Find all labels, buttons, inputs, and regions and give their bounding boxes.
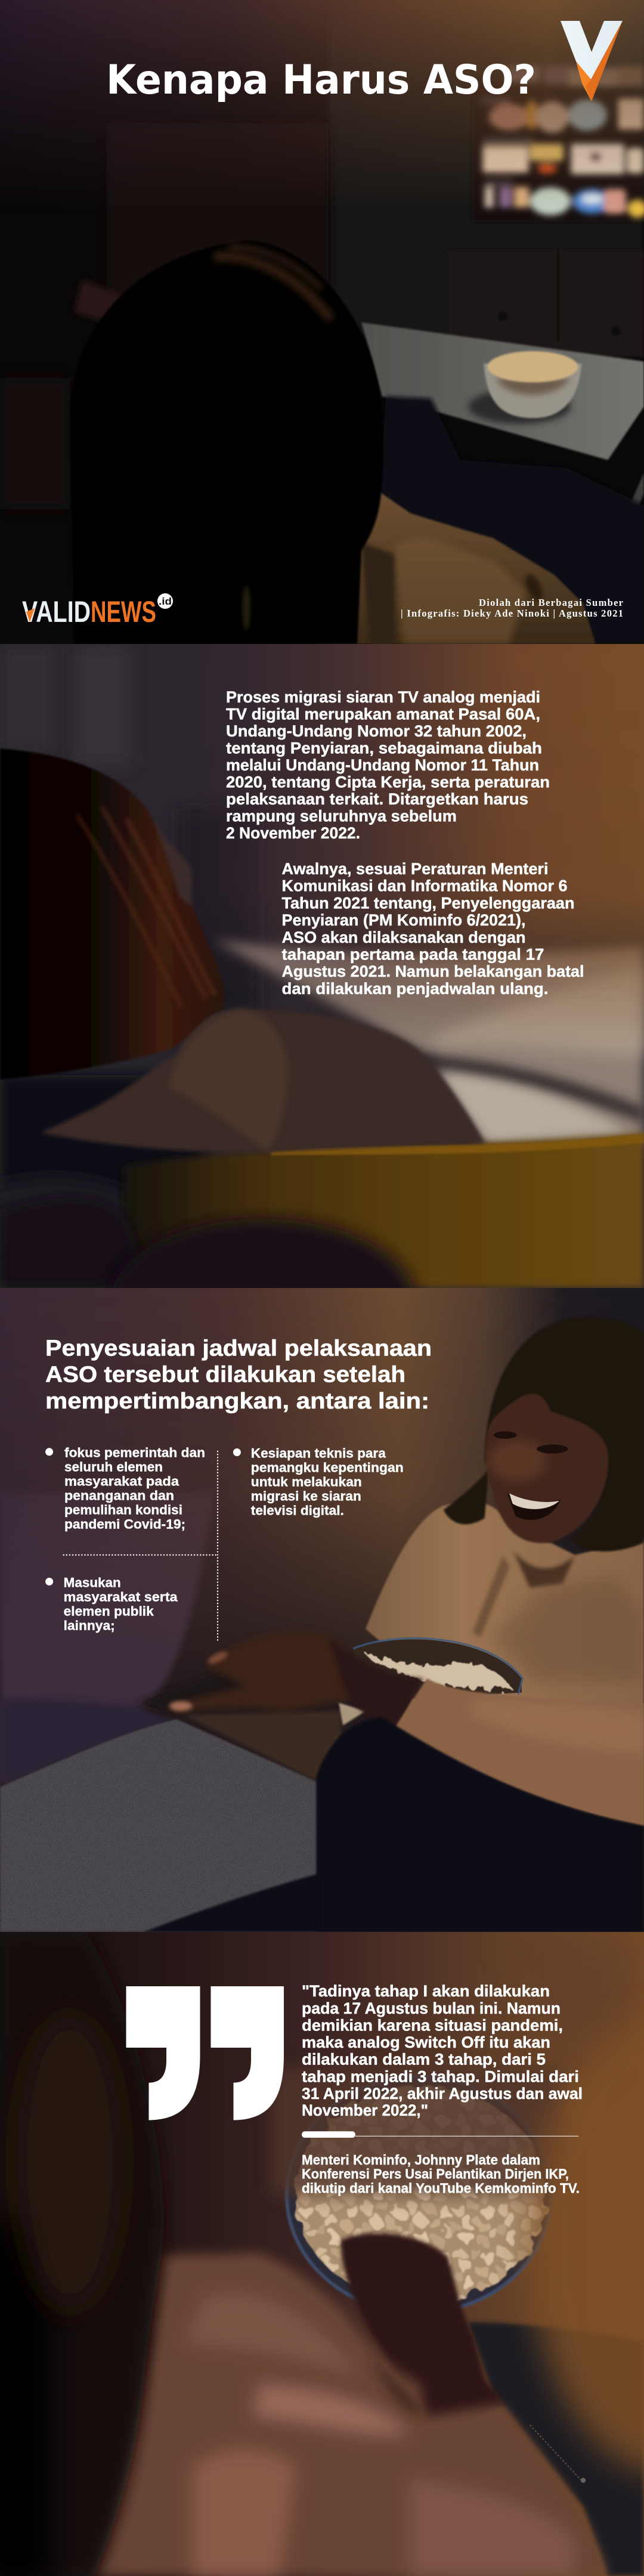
list item: public input: elemen publik — [64, 1604, 154, 1618]
popcorn bowl — [339, 1638, 522, 1726]
text block: schedule change: Tahun 2021 tentang, Penyelenggaraan — [281, 894, 575, 912]
TV cabinet — [448, 250, 644, 357]
text block: schedule change: tahapan pertama pada tanggal 17 — [281, 946, 544, 964]
hand and forearm — [341, 2233, 505, 2441]
list item: public input — [45, 1575, 178, 1633]
list item: government focus: masyarakat pada — [64, 1474, 179, 1489]
panel: minister quote — [0, 1932, 644, 2576]
text block: schedule change: ASO akan dilaksanakan dengan — [281, 928, 526, 946]
source credit: | Infografis: Dieky Ade Ninoki | Agustus 2021 — [401, 608, 623, 619]
list item: public input: masyarakat serta — [64, 1590, 178, 1604]
heading — [45, 1336, 432, 1414]
quote text — [302, 1982, 583, 2119]
curtain — [0, 1493, 213, 1785]
viewer's head — [70, 240, 383, 644]
background photo: dim room with TV and viewer — [0, 0, 644, 644]
blurred hoodie — [94, 2252, 608, 2576]
source credit — [401, 597, 623, 619]
text block: migration mandate: melalui Undang-Undang Nomor 11 Tahun — [226, 756, 539, 774]
face — [485, 1394, 608, 1543]
face profile — [153, 816, 193, 907]
hair — [0, 749, 224, 1079]
title: Kenapa Harus ASO? — [106, 57, 536, 104]
icon: closing quotation marks — [126, 1986, 284, 2120]
quote text: November 2022," — [302, 2101, 428, 2119]
text block: schedule change — [281, 860, 584, 998]
quote attribution: dikutip dari kanal YouTube Kemkominfo TV. — [302, 2181, 580, 2196]
quote attribution — [302, 2152, 580, 2196]
heading: Penyesuaian jadwal pelaksanaan — [45, 1336, 432, 1361]
popcorn bowl — [468, 351, 581, 424]
panel: opening cover with title — [0, 0, 644, 644]
list item: government focus: fokus pemerintah dan — [64, 1445, 205, 1460]
lower shadow — [0, 1071, 208, 1207]
panel: reasons for rescheduling — [0, 1288, 644, 1932]
jeans — [370, 397, 644, 644]
carpet — [0, 1715, 329, 1932]
logo: Validnews.id: .id — [159, 596, 172, 607]
logo: Validnews.id: NEWS — [91, 595, 156, 628]
hoodie torso — [366, 1501, 644, 1826]
coffee table — [361, 323, 644, 460]
quote text: "Tadinya tahap I akan dilakukan — [302, 1982, 550, 2000]
heading: ASO tersebut dilakukan setelah — [45, 1363, 405, 1388]
popcorn bowl — [271, 2067, 567, 2314]
background photo: hand in popcorn bowl — [0, 1932, 644, 2576]
text block: migration mandate: 2020, tentang Cipta Kerja, serta peraturan — [226, 773, 550, 791]
text block: migration mandate: 2 November 2022. — [226, 824, 360, 842]
background photo: wall and lit sofa — [0, 644, 644, 1288]
text block: schedule change: Awalnya, sesuai Peraturan Menteri — [281, 860, 549, 878]
text block: schedule change: Agustus 2021. Namun belakangan batal — [281, 962, 584, 980]
icon: V brand mark — [561, 21, 623, 101]
hoodie — [316, 491, 596, 644]
quote attribution: Konferensi Pers Usai Pelantikan Dirjen IKP, — [302, 2166, 569, 2181]
divider — [302, 2131, 578, 2138]
logo: Validnews.id: VALID — [22, 595, 91, 628]
TV screen — [472, 66, 644, 222]
mustard pillow — [0, 1133, 644, 1383]
quote text: tahap menjadi 3 tahap. Dimulai dari — [302, 2068, 579, 2086]
list item: government focus: pemulihan kondisi — [64, 1503, 182, 1517]
list item: government focus: pandemi Covid-19; — [64, 1516, 185, 1531]
text block: schedule change: dan dilakukan penjadwalan ulang. — [281, 980, 549, 998]
list item: public input: Masukan — [64, 1575, 121, 1590]
text block: migration mandate — [226, 688, 550, 842]
quote attribution: Menteri Kominfo, Johnny Plate dalam — [302, 2152, 540, 2168]
quote text: maka analog Switch Off itu akan — [302, 2033, 550, 2051]
text block: schedule change: Penyiaran (PM Kominfo 6/2021), — [281, 911, 526, 929]
quote text: dilakukan dalam 3 tahap, dari 5 — [302, 2051, 546, 2069]
text block: schedule change: Komunikasi dan Informatika Nomor 6 — [281, 877, 568, 895]
text block: migration mandate: tentang Penyiaran, sebagaimana diubah — [226, 739, 542, 757]
list item: technical readiness: pemangku kepentingan — [251, 1460, 404, 1475]
text block: migration mandate: Undang-Undang Nomor 32 tahun 2002, — [226, 722, 527, 740]
right orange glow — [530, 2014, 644, 2474]
jeans — [468, 2322, 644, 2576]
list item: technical readiness: Kesiapan teknis para — [251, 1445, 386, 1461]
list item: technical readiness — [233, 1445, 404, 1518]
hair — [485, 1317, 644, 1552]
quote text: pada 17 Agustus bulan ini. Namun — [302, 1999, 561, 2017]
background photo: woman lying on sofa — [0, 749, 644, 1383]
logo: Validnews.id — [22, 593, 173, 628]
panel: legal background — [0, 644, 644, 1288]
remote and hand — [135, 1631, 357, 1711]
list item: government focus: penanganan dan — [64, 1488, 174, 1503]
quote text: demikian karena situasi pandemi, — [302, 2017, 563, 2035]
list item: technical readiness: untuk melakukan — [251, 1474, 362, 1489]
source credit: Diolah dari Berbagai Sumber — [479, 597, 623, 608]
list item: technical readiness: migrasi ke siaran — [251, 1488, 361, 1503]
background photo: woman laughing with popcorn — [135, 1317, 644, 1932]
hoodie — [41, 1010, 485, 1152]
text block: migration mandate: rampung seluruhnya sebelum — [226, 807, 457, 825]
text block: migration mandate: Proses migrasi siaran TV analog menjadi — [226, 688, 540, 706]
list item: technical readiness: televisi digital. — [251, 1503, 344, 1518]
text block: migration mandate: pelaksanaan terkait. Ditargetkan harus — [226, 790, 528, 808]
jeans — [144, 1717, 644, 1932]
list item: public input: lainnya; — [64, 1618, 115, 1633]
background photo: wall, curtain and carpet — [0, 1288, 644, 1932]
foreground hair — [0, 1932, 165, 2576]
text block: migration mandate: TV digital merupakan amanat Pasal 60A, — [226, 705, 540, 723]
quote text: 31 April 2022, akhir Agustus dan awal — [302, 2085, 583, 2103]
arm and sleeve — [329, 1637, 644, 1826]
top colour wash — [0, 0, 644, 213]
list item: government focus: seluruh elemen — [64, 1460, 163, 1475]
heading: mempertimbangkan, antara lain: — [45, 1389, 429, 1414]
list item: government focus — [45, 1445, 205, 1531]
second viewer in shadow — [0, 279, 123, 509]
